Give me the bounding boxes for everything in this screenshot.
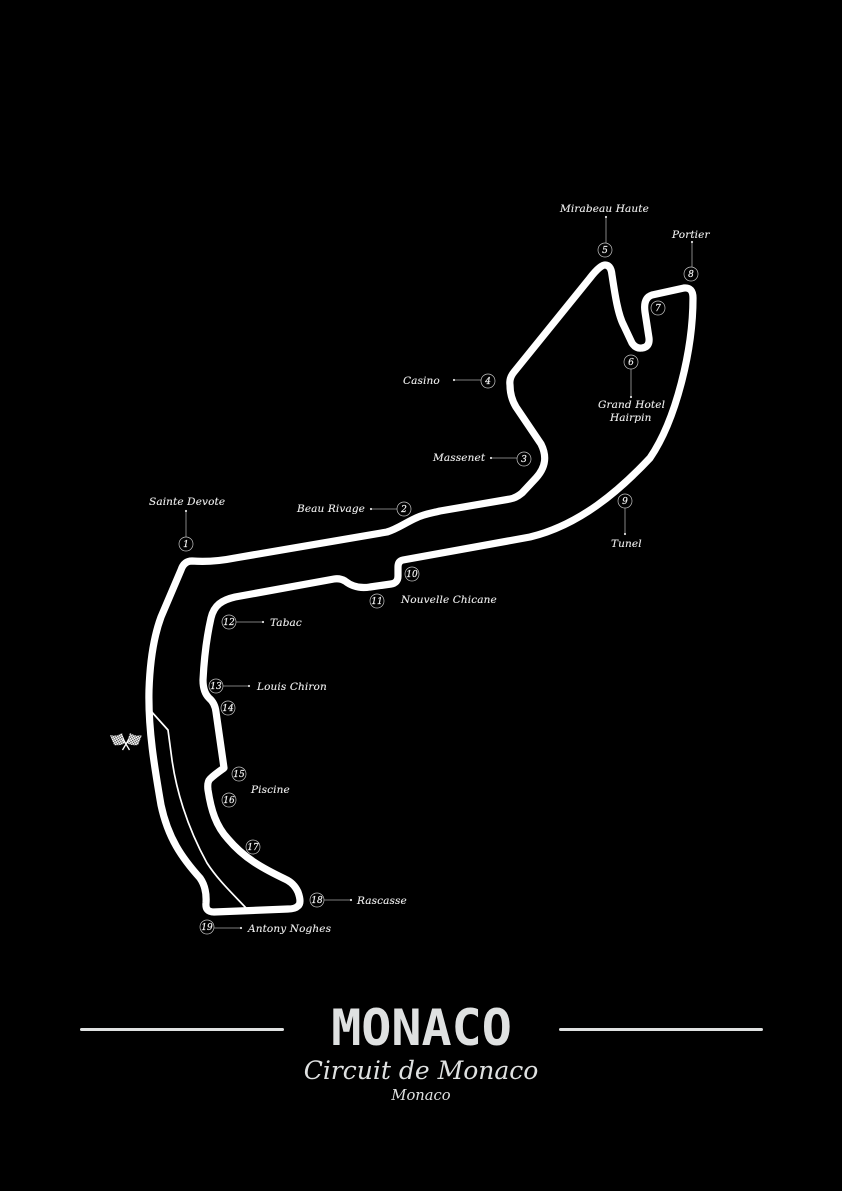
corner 12: Tabac bbox=[222, 615, 302, 629]
corner 7 bbox=[651, 301, 665, 315]
circuit name: Circuit de Monaco bbox=[304, 1056, 538, 1085]
corner 13: Louis Chiron: 13 bbox=[210, 682, 222, 692]
corner 3: Massenet: Massenet bbox=[432, 452, 486, 464]
corner 2: Beau Rivage: Beau Rivage bbox=[296, 503, 365, 515]
corner 4: Casino: 4 bbox=[484, 377, 491, 387]
country: Monaco bbox=[390, 1087, 451, 1104]
corner 12: Tabac: 12 bbox=[223, 618, 235, 628]
corner 19: Antony Noghes: 19 bbox=[201, 923, 213, 933]
corner 12: Tabac: Tabac bbox=[270, 617, 302, 629]
corner 17 bbox=[246, 840, 260, 854]
title: MONACO bbox=[331, 999, 512, 1057]
corner 5: Mirabeau Haute bbox=[559, 203, 649, 257]
corner 18: Rascasse bbox=[310, 893, 407, 907]
corner 6: Grand Hotel Hairpin bbox=[598, 355, 665, 424]
corner 11: Nouvelle Chicane bbox=[370, 594, 497, 608]
corner 10 bbox=[405, 567, 419, 581]
corner 8: Portier: 8 bbox=[688, 270, 694, 280]
left title rule bbox=[80, 1028, 284, 1031]
corner 15: Piscine: Piscine bbox=[250, 784, 290, 796]
corner 9: Tunel bbox=[611, 494, 642, 550]
corner 8: Portier: Portier bbox=[671, 229, 710, 241]
right title rule bbox=[559, 1028, 763, 1031]
corner 14 bbox=[221, 701, 235, 715]
corner 1: Sainte Devote bbox=[149, 496, 225, 551]
pit lane bbox=[150, 710, 247, 909]
corner 5: Mirabeau Haute: Mirabeau Haute bbox=[559, 203, 649, 215]
corner 6: Grand Hotel Hairpin: 6 bbox=[628, 358, 634, 368]
corner 5: Mirabeau Haute: 5 bbox=[602, 246, 608, 256]
corner 3: Massenet bbox=[432, 452, 531, 466]
circuit track bbox=[149, 265, 693, 912]
corner 19: Antony Noghes: Antony Noghes bbox=[247, 923, 332, 935]
corner 14: 14 bbox=[222, 704, 234, 714]
corner 19: Antony Noghes bbox=[200, 920, 332, 935]
corner 11: Nouvelle Chicane: Nouvelle Chicane bbox=[400, 594, 497, 606]
corner 13: Louis Chiron: Louis Chiron bbox=[256, 681, 327, 693]
corner 4: Casino: Casino bbox=[403, 375, 440, 387]
corner 15: Piscine: 15 bbox=[233, 770, 245, 780]
corner 8: Portier bbox=[671, 229, 710, 281]
corner 7: 7 bbox=[655, 304, 661, 314]
corner 18: Rascasse: Rascasse bbox=[356, 895, 407, 907]
corner 11: Nouvelle Chicane: 11 bbox=[371, 597, 383, 607]
corner 18: Rascasse: 18 bbox=[311, 896, 323, 906]
corner 1: Sainte Devote: Sainte Devote bbox=[149, 496, 225, 508]
corner 2: Beau Rivage bbox=[296, 502, 411, 516]
corner 9: Tunel: 9 bbox=[622, 497, 628, 507]
corner 1: Sainte Devote: 1 bbox=[183, 540, 189, 550]
corner 2: Beau Rivage: 2 bbox=[400, 505, 407, 515]
icon: checkered flags bbox=[110, 733, 142, 750]
corner 16 bbox=[222, 793, 236, 807]
corner 6: Grand Hotel Hairpin: Grand Hotel bbox=[598, 399, 665, 411]
corner 6: Grand Hotel Hairpin: Hairpin bbox=[609, 412, 652, 424]
corner 13: Louis Chiron bbox=[209, 679, 327, 693]
corner 4: Casino bbox=[403, 374, 495, 388]
corner 9: Tunel: Tunel bbox=[611, 538, 642, 550]
corner 10: 10 bbox=[406, 570, 418, 580]
corner 3: Massenet: 3 bbox=[521, 455, 527, 465]
corner 16: 16 bbox=[223, 796, 235, 806]
corner 15: Piscine bbox=[232, 767, 290, 796]
corner 17: 17 bbox=[247, 843, 259, 853]
